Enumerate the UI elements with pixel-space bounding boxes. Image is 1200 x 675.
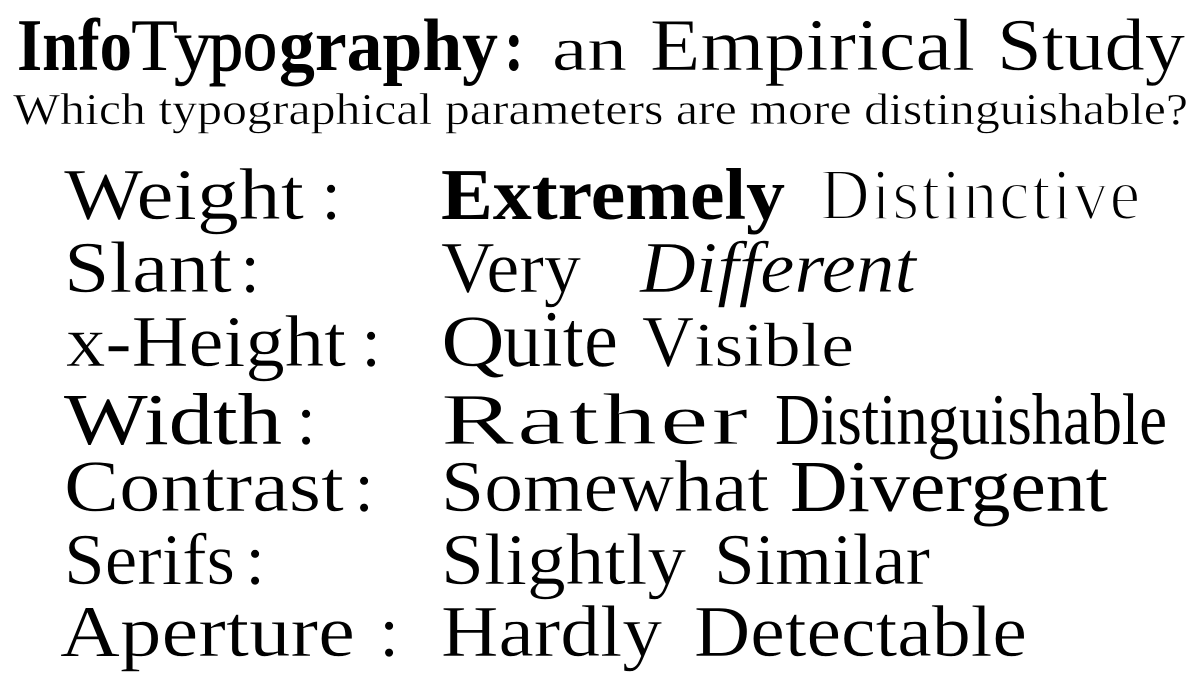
subtitle: Which typographical parameters are more distinguishable? bbox=[13, 85, 1188, 134]
row: x-height: : bbox=[361, 301, 381, 382]
row: contrast: Contrast bbox=[64, 446, 344, 527]
row: aperture: Aperture bbox=[60, 591, 355, 672]
title: Empirical bbox=[650, 5, 975, 87]
row: x-height: uite bbox=[503, 296, 618, 384]
row: slant: Very bbox=[441, 227, 582, 308]
title: graphy bbox=[279, 5, 498, 87]
row: serifs: Serifs bbox=[64, 519, 235, 600]
row: aperture: : bbox=[379, 591, 399, 672]
title: po bbox=[209, 5, 277, 87]
title: y bbox=[174, 5, 212, 87]
row: aperture bbox=[60, 591, 1027, 672]
row: slant: Slant bbox=[64, 227, 232, 308]
row: width bbox=[64, 379, 1167, 460]
row: serifs: Similar bbox=[714, 519, 930, 600]
row: slant: Different bbox=[639, 227, 918, 308]
row: weight: Weight bbox=[64, 154, 304, 235]
row: width: Rather bbox=[441, 379, 751, 460]
row: slant bbox=[64, 227, 918, 308]
row: weight: Distinctive bbox=[820, 154, 1142, 235]
title: an bbox=[552, 16, 627, 84]
row: serifs bbox=[64, 519, 930, 600]
title: : bbox=[504, 5, 524, 87]
title: Info bbox=[17, 5, 132, 87]
row: x-height: isible bbox=[694, 312, 854, 380]
row: weight bbox=[64, 154, 1142, 235]
row: x-height: Q bbox=[441, 301, 505, 382]
row: contrast: Somewhat bbox=[441, 446, 769, 527]
row: weight: Extremely bbox=[441, 154, 785, 235]
row: aperture: Hardly bbox=[441, 591, 663, 672]
row: width: : bbox=[296, 379, 316, 460]
row: contrast bbox=[64, 446, 1108, 527]
row: width: Width bbox=[64, 379, 282, 460]
row: slant: : bbox=[240, 227, 260, 308]
row: contrast: Divergent bbox=[790, 446, 1108, 527]
title: T bbox=[131, 5, 178, 87]
row: weight: : bbox=[321, 154, 341, 235]
row: aperture: Detectable bbox=[694, 591, 1027, 672]
row: x-height bbox=[66, 296, 854, 384]
row: serifs: Slightly bbox=[441, 519, 687, 600]
row: contrast: : bbox=[354, 446, 374, 527]
title: Study bbox=[997, 5, 1185, 87]
title bbox=[17, 5, 1185, 87]
row: serifs: : bbox=[245, 519, 265, 600]
row: x-height: x-Height bbox=[66, 301, 346, 382]
row: x-height: V bbox=[642, 301, 694, 382]
